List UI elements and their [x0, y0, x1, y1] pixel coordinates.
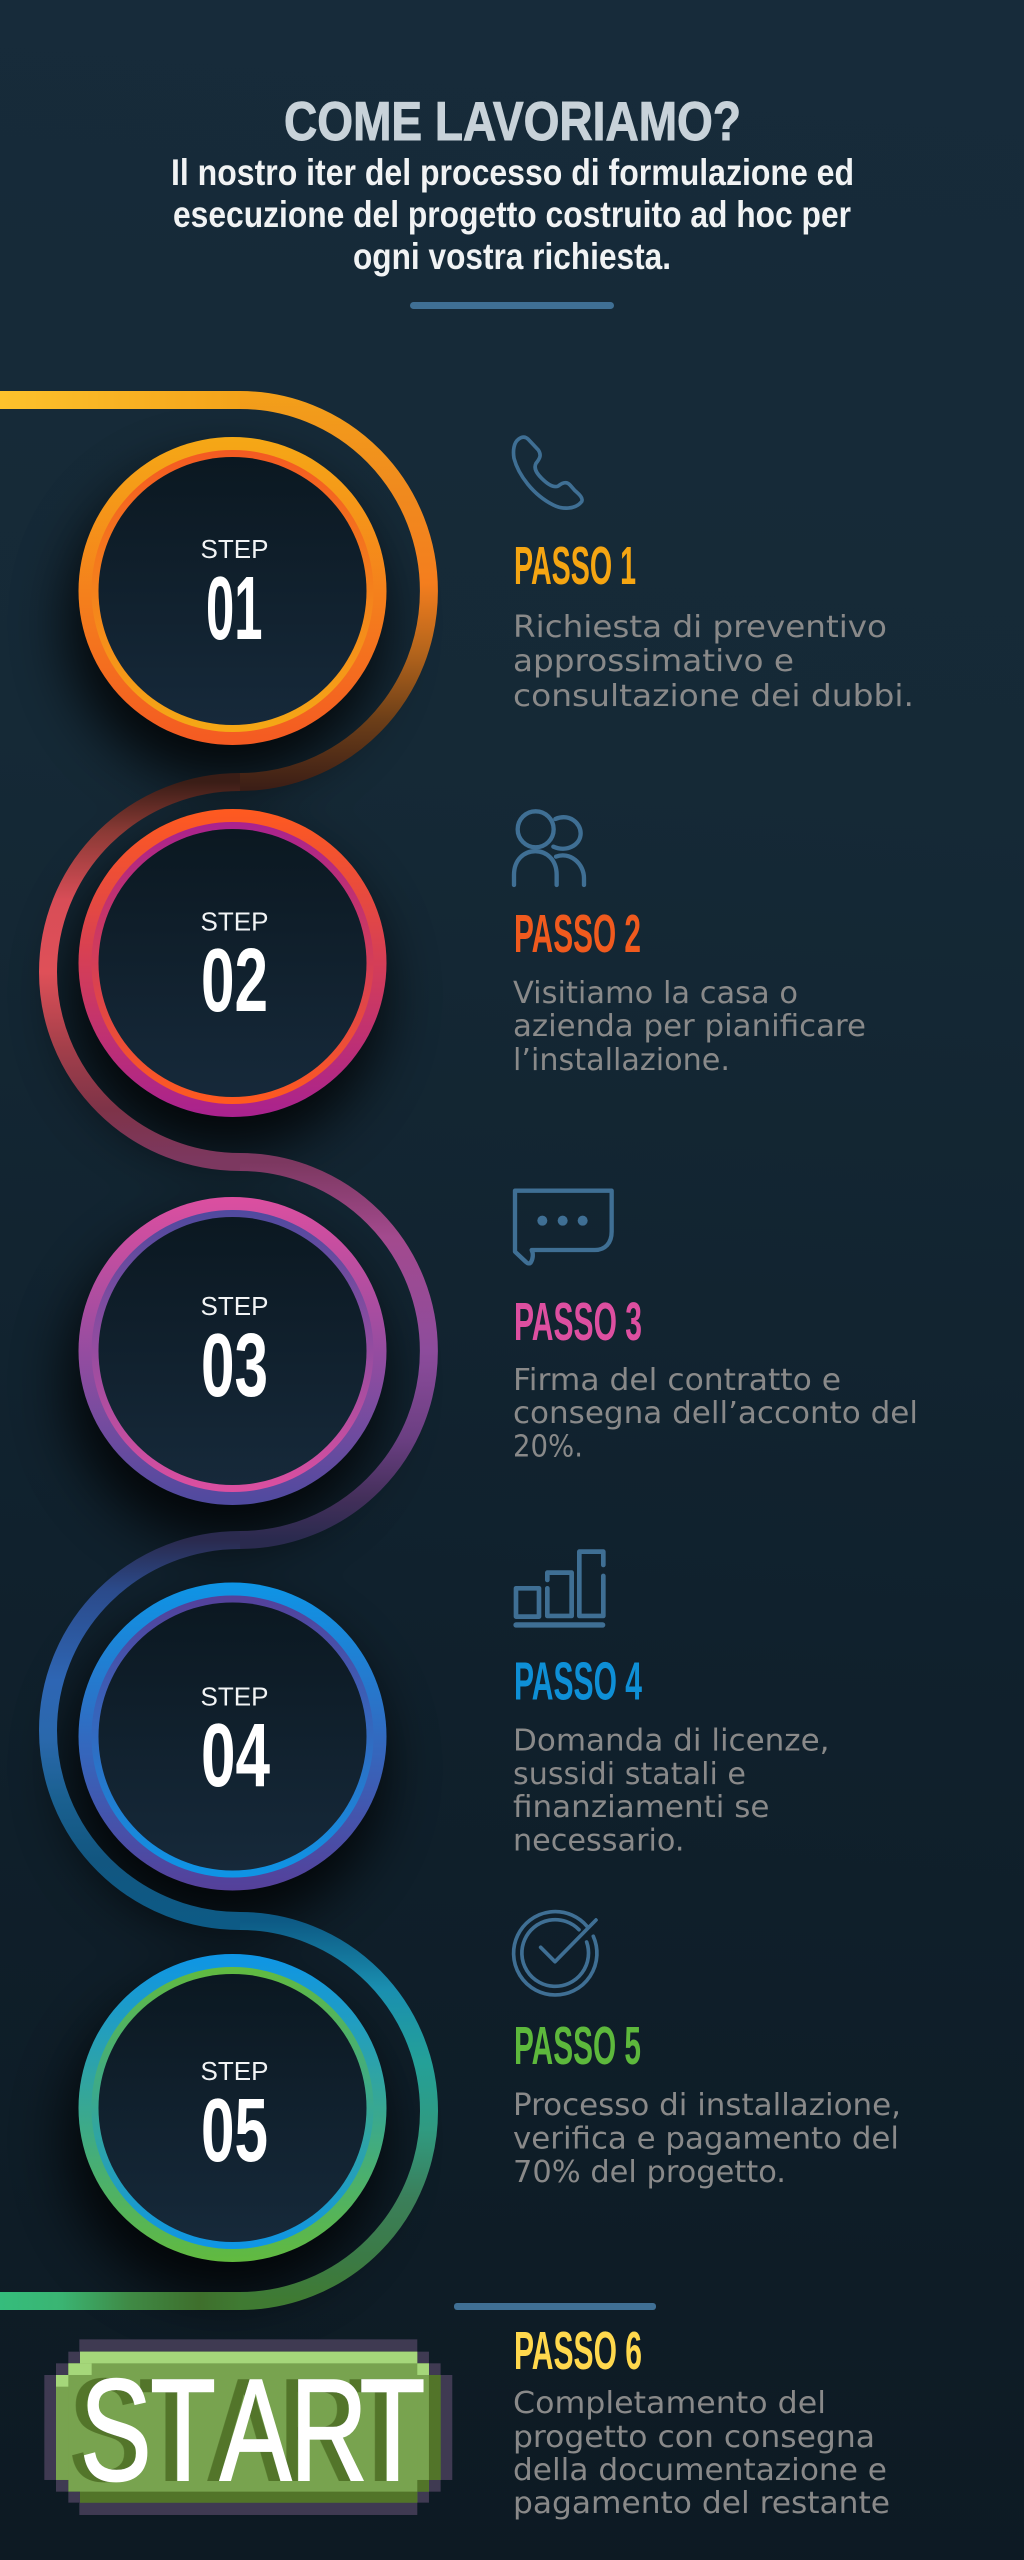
text: passo 5: verifica e pagamento del [513, 2122, 899, 2156]
panel: passo 5 [513, 1912, 901, 2190]
text: passo 5: Processo di installazione, [513, 2088, 901, 2123]
start button [44, 2339, 452, 2515]
step circle 02: 02 [201, 931, 268, 1031]
subtitle [171, 152, 854, 277]
button label: START [80, 2350, 425, 2512]
text: passo 2: l’installazione. [513, 1043, 730, 1078]
step circle 04: STEP [200, 1682, 268, 1712]
step circle 05: 05 [201, 2081, 268, 2181]
step circle 05 [78, 1954, 386, 2262]
step circle 04 [78, 1582, 386, 1890]
step circle 05: STEP [200, 2056, 268, 2086]
text: passo 3: 20%. [513, 1430, 583, 1464]
icon: people [514, 811, 584, 885]
heading: passo 2: PASSO 2 [514, 904, 641, 964]
step circle 02 [78, 809, 386, 1117]
text: passo 2 [513, 976, 866, 1078]
text: passo 3: consegna dell’acconto del [513, 1396, 918, 1431]
subtitle: ogni vostra richiesta. [353, 236, 671, 277]
text: passo 4: sussidi statali e [513, 1757, 746, 1792]
header divider [410, 302, 614, 309]
text: passo 1: approssimativo e [513, 644, 794, 679]
bottom divider [454, 2303, 656, 2310]
connector path [0, 400, 429, 2301]
text: passo 1 [513, 610, 914, 714]
step circle 04: 04 [201, 1706, 270, 1806]
panel: passo 4 [513, 1552, 830, 1858]
text: passo 6: progetto con consegna [513, 2420, 875, 2455]
text: passo 3 [513, 1363, 918, 1464]
icon: chat bubble [515, 1191, 612, 1263]
text: passo 5: 70% del progetto. [513, 2155, 786, 2190]
text: passo 3: Firma del contratto e [513, 1363, 841, 1398]
subtitle: Il nostro iter del processo di formulazione ed [171, 152, 854, 193]
subtitle: esecuzione del progetto costruito ad hoc per [173, 194, 851, 235]
step circle 01: STEP [200, 534, 268, 564]
heading: passo 4: PASSO 4 [514, 1652, 642, 1712]
step circle 01: 01 [206, 559, 262, 659]
heading: passo 3: PASSO 3 [514, 1292, 642, 1352]
heading: passo 6: PASSO 6 [514, 2321, 642, 2381]
heading: passo 1: PASSO 1 [514, 536, 636, 596]
heading: passo 5: PASSO 5 [514, 2016, 641, 2076]
step circle 01 [78, 437, 386, 745]
panel: passo 1 [513, 437, 914, 714]
text: passo 1: Richiesta di preventivo [513, 610, 887, 645]
header [171, 90, 854, 309]
text: passo 4: Domanda di licenze, [513, 1724, 830, 1758]
text: passo 4 [513, 1724, 830, 1858]
text: passo 4: necessario. [513, 1824, 684, 1858]
step circle 03: STEP [200, 1291, 268, 1321]
text: passo 4: finanziamenti se [513, 1790, 770, 1825]
text: passo 6: Completamento del [513, 2386, 826, 2421]
text: passo 6: pagamento del restante [513, 2486, 890, 2521]
text: passo 5 [513, 2088, 901, 2190]
panel: passo 3 [513, 1191, 918, 1464]
step circle 03: 03 [201, 1316, 268, 1416]
text: passo 1: consultazione dei dubbi. [513, 679, 914, 714]
icon: check circle [514, 1912, 597, 1995]
circle shadows [67, 465, 383, 2298]
text: passo 6: della documentazione e [513, 2453, 887, 2488]
panel: passo 2 [513, 811, 866, 1078]
title: COME LAVORIAMO? [284, 90, 741, 152]
icon: phone [514, 437, 582, 508]
step circle 02: STEP [200, 906, 268, 936]
icon: bar chart [516, 1552, 603, 1625]
step circle 03 [78, 1197, 386, 1505]
text: passo 6 [513, 2386, 890, 2521]
panel: passo 6 [513, 2321, 890, 2521]
text: passo 2: azienda per pianificare [513, 1009, 866, 1044]
text: passo 2: Visitiamo la casa o [513, 976, 798, 1011]
